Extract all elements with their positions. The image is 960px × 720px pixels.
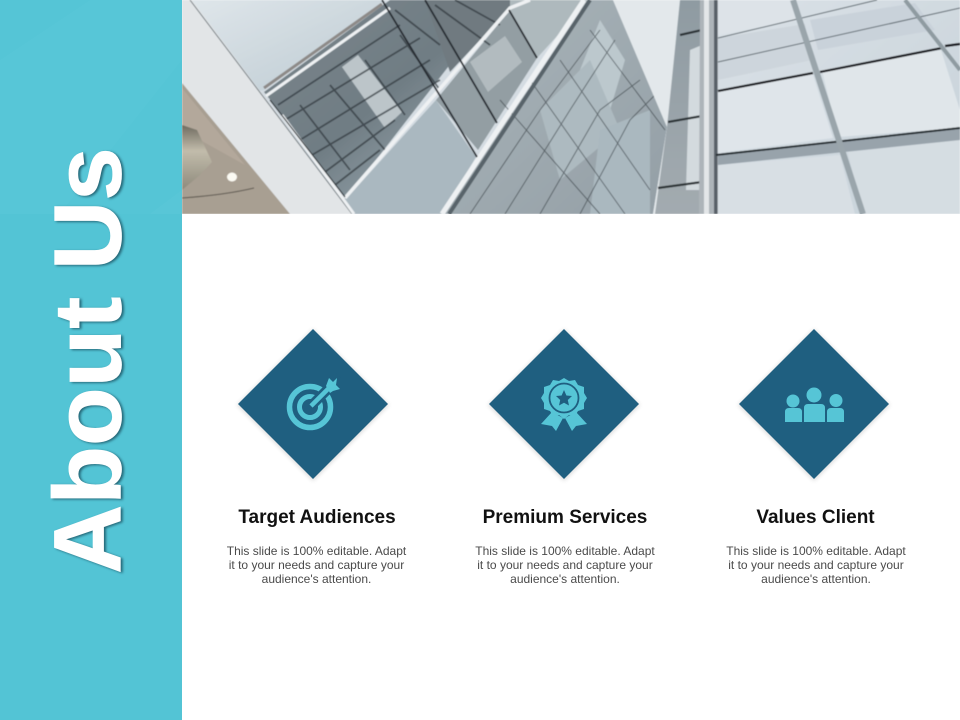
text: target audiences description: it to your needs and capture your — [229, 558, 404, 572]
text: premium services description: it to your needs and capture your — [477, 558, 653, 572]
text: target audiences description: audience's attention. — [262, 572, 371, 586]
dark mullions — [382, 0, 537, 157]
text: target audiences description: This slide is 100% editable. Adapt — [227, 544, 406, 558]
steel frame — [699, 0, 718, 214]
text: values client description: it to your needs and capture your — [728, 558, 904, 572]
panel: left teal sidebar — [0, 0, 182, 720]
icon: award rosette — [541, 378, 587, 431]
heading: Values Client: Values Client — [756, 507, 875, 528]
diamond card icon: premium services — [488, 329, 640, 481]
white mid panels — [613, 0, 688, 214]
text: premium services description: audience's attention. — [510, 572, 620, 586]
text: values client description: audience's attention. — [761, 572, 871, 586]
icon: target with arrow — [290, 377, 340, 428]
title: About Us: About Us — [35, 147, 142, 574]
white window frames — [266, 0, 584, 214]
text: values client description — [726, 544, 906, 586]
heading: Target Audiences: Target Audiences — [238, 507, 396, 528]
diamond card icon: values client — [738, 329, 890, 481]
right curtain wall panes — [718, 0, 960, 214]
reflected dark stripes — [278, 0, 500, 185]
heading: Premium Services: Premium Services — [483, 507, 647, 528]
text: premium services description — [475, 544, 655, 586]
glass façade left — [264, 0, 500, 200]
text: values client description: This slide is 100% editable. Adapt — [726, 544, 906, 558]
text: premium services description: This slide is 100% editable. Adapt — [475, 544, 655, 558]
ceiling and beam — [190, 0, 385, 92]
text: target audiences description — [227, 544, 406, 586]
diamond card icon: target audiences — [237, 329, 389, 481]
icon: three people — [785, 388, 844, 422]
photo: glass office building — [182, 0, 960, 214]
